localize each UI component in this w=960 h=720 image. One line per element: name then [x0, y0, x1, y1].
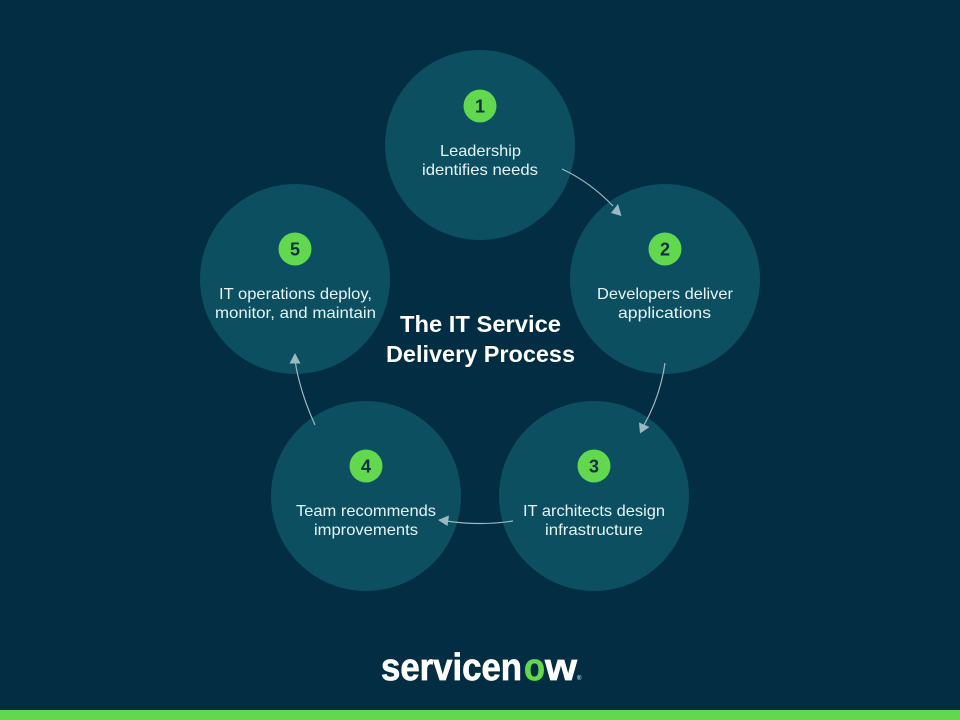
step 5: IT operations deploy, monitor, and maintain	[200, 184, 390, 374]
green footer bar	[0, 710, 960, 720]
step 4: team recommends improvements	[271, 401, 461, 591]
step 5: IT operations deploy, monitor, and maintain: 5	[290, 240, 300, 260]
step 4: team recommends improvements: Team recommends	[296, 503, 436, 520]
arrow: step 4 to step 5	[290, 353, 315, 425]
logo: servicenow: o	[524, 647, 545, 689]
step 1: leadership identifies needs	[385, 50, 575, 240]
step 5: IT operations deploy, monitor, and maintain: monitor, and maintain	[215, 305, 376, 322]
arrow: step 3 to step 4	[438, 516, 513, 526]
step 1: leadership identifies needs: identifies needs	[422, 162, 538, 179]
arrow: step 2 to step 3	[639, 363, 665, 434]
logo: servicenow: ®	[577, 675, 582, 682]
step 4: team recommends improvements: improvements	[314, 522, 418, 539]
logo: servicenow: servicen	[381, 647, 522, 689]
logo: servicenow: w	[544, 647, 577, 689]
step 2: developers deliver applications	[570, 184, 760, 374]
step 2: developers deliver applications: 2	[660, 240, 670, 260]
step 1: leadership identifies needs: 1	[475, 96, 485, 116]
step 3: IT architects design infrastructure: IT architects design	[523, 503, 665, 520]
arrow: step 1 to step 2	[562, 169, 622, 216]
step 1: leadership identifies needs: Leadership	[440, 143, 521, 160]
step 2: developers deliver applications: applications	[618, 305, 711, 322]
step 3: IT architects design infrastructure: infrastructure	[545, 522, 643, 539]
step 2: developers deliver applications: Developers deliver	[597, 286, 734, 303]
title: The IT Service	[400, 311, 561, 337]
step 3: IT architects design infrastructure: 3	[589, 456, 599, 476]
step 3: IT architects design infrastructure	[499, 401, 689, 591]
step 5: IT operations deploy, monitor, and maintain: IT operations deploy,	[219, 286, 372, 303]
title: Delivery Process	[386, 341, 575, 367]
title	[386, 311, 575, 367]
step 4: team recommends improvements: 4	[361, 456, 371, 476]
